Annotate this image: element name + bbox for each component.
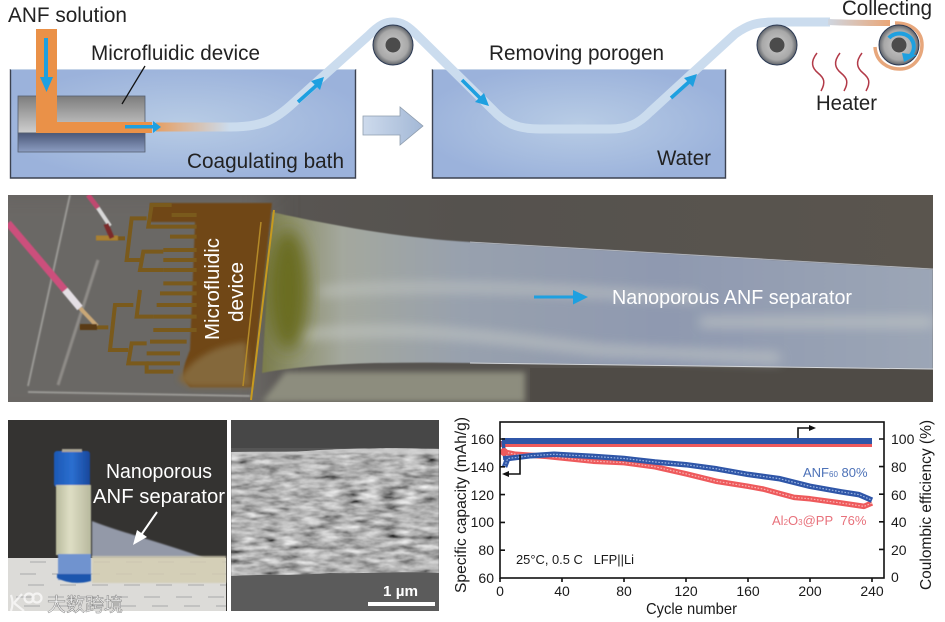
water tank <box>432 69 726 178</box>
Al2O3@PP capacity <box>502 452 872 506</box>
x tick labels: 120 <box>674 583 698 599</box>
heater waves <box>813 53 869 91</box>
separator film path <box>156 22 890 129</box>
ANF60 capacity <box>505 454 872 500</box>
microfluidic device body <box>18 96 145 152</box>
left tick labels: 60 <box>478 570 494 586</box>
roller 2 <box>757 25 797 65</box>
panel: photo of microfluidic device and separator <box>8 195 933 402</box>
schematic labels: Water <box>657 147 711 170</box>
series label Al2O3@PP: Al2O3@PP 76% <box>772 513 867 528</box>
schematic labels: Microfluidic device <box>91 42 260 65</box>
Al2O3@PP coulombic efficiency <box>500 441 872 447</box>
battery labels: Nanoporous <box>106 461 212 483</box>
left axis pointer <box>502 455 520 477</box>
photo labels: Nanoporous ANF separator <box>612 287 852 309</box>
battery labels: ANF separator <box>93 486 225 508</box>
SEM cross section <box>231 445 439 580</box>
schematic labels: Removing porogen <box>489 42 664 65</box>
right tick labels: 40 <box>891 514 907 530</box>
x tick labels: 240 <box>860 583 884 599</box>
right tick labels: 0 <box>891 569 899 585</box>
blue flow arrows <box>40 38 697 133</box>
schematic labels: ANF solution <box>8 4 127 27</box>
transparent chip edges <box>28 195 250 396</box>
paper <box>8 558 226 611</box>
left axis title: Specific capacity (mAh/g) <box>453 417 470 593</box>
photo labels: Microfluidic <box>202 238 224 340</box>
scale bar: 1 µm <box>383 583 418 600</box>
axes frame <box>500 422 884 582</box>
schematic labels: Heater <box>816 92 877 115</box>
leader line <box>122 66 145 104</box>
x tick labels <box>496 583 884 599</box>
x tick labels: 200 <box>798 583 822 599</box>
battery labels <box>93 461 225 508</box>
x axis title: Cycle number <box>646 601 738 618</box>
battery <box>54 449 91 583</box>
photo labels: device <box>226 262 248 322</box>
right tick labels: 80 <box>891 459 907 475</box>
left tick labels: 160 <box>471 431 494 447</box>
left tick labels: 100 <box>471 514 494 530</box>
scale bar <box>368 583 435 606</box>
inlet ports and tubing <box>8 195 118 327</box>
left tick labels: 80 <box>478 542 494 558</box>
photo labels <box>202 238 852 340</box>
watermark <box>11 590 123 617</box>
SEM background <box>231 420 439 611</box>
data series <box>500 441 872 506</box>
left tick labels: 140 <box>471 459 494 475</box>
series label ANF60: ANF60 80% <box>803 465 868 480</box>
separator sheet <box>92 521 226 583</box>
schematic labels: Coagulating bath <box>187 150 344 173</box>
block arrow <box>363 107 423 145</box>
right tick labels: 100 <box>891 431 915 447</box>
x tick labels: 0 <box>496 583 504 599</box>
right tick labels <box>891 431 915 585</box>
chart: capacity and coulombic efficiency <box>453 417 935 618</box>
separator film <box>262 212 933 373</box>
left tick labels <box>471 431 494 586</box>
panel: SEM image <box>231 420 439 611</box>
x tick labels: 40 <box>554 583 570 599</box>
ANF60 coulombic efficiency <box>502 438 872 444</box>
orange ANF channel <box>36 29 152 133</box>
device gold area <box>150 203 274 400</box>
microchannel tree <box>80 205 197 372</box>
flow arrow <box>534 290 588 304</box>
right tick labels: 60 <box>891 487 907 503</box>
photo background <box>8 195 933 402</box>
panel: battery photo <box>8 420 227 611</box>
white arrow <box>133 512 157 545</box>
condition label: 25°C, 0.5 C LFP||Li <box>516 552 634 567</box>
left tick labels: 120 <box>471 487 494 503</box>
watermark: 大数跨境 <box>47 590 123 617</box>
right axis title: Coulombic efficiency (%) <box>918 420 935 590</box>
roller 1 <box>373 25 413 65</box>
right tick labels: 20 <box>891 542 907 558</box>
right axis pointer <box>798 425 816 438</box>
background <box>8 420 227 611</box>
collecting roller <box>875 23 922 69</box>
x tick labels: 80 <box>616 583 632 599</box>
x tick labels: 160 <box>736 583 760 599</box>
panel: process schematic <box>8 0 932 178</box>
coagulating bath tank <box>10 69 356 178</box>
schematic labels <box>8 0 932 173</box>
